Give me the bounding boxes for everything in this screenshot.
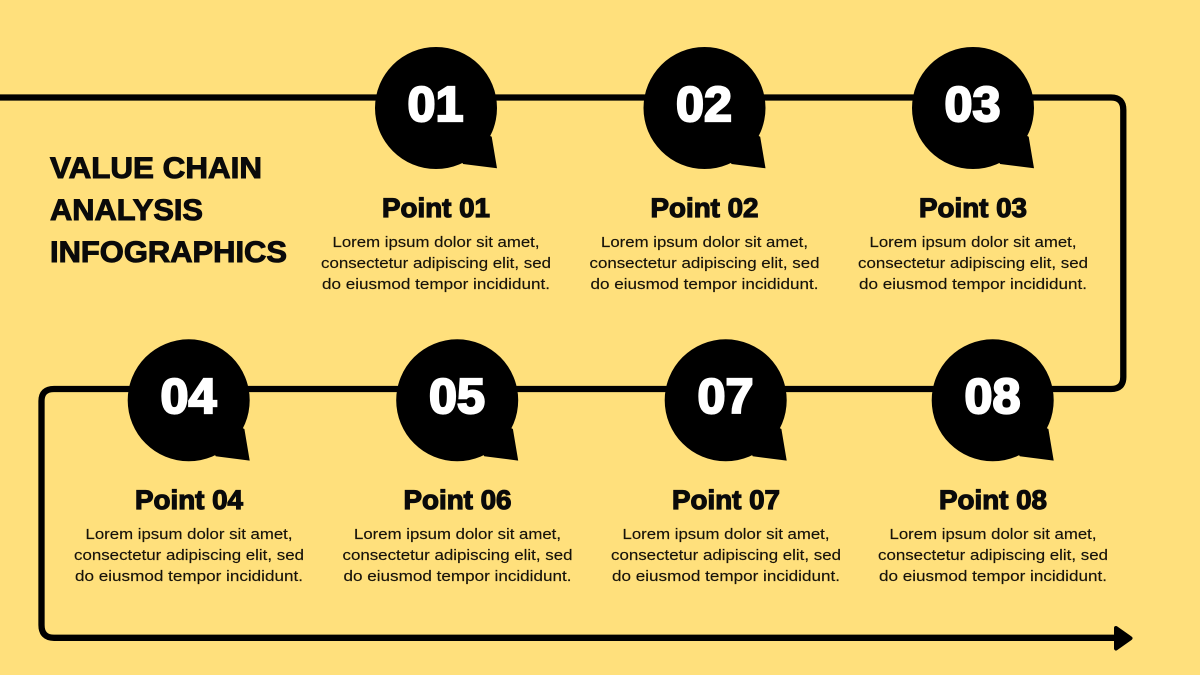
description 07: do eiusmod tempor incididunt. [612, 569, 840, 585]
heading: Point 03: Point 03 [919, 193, 1027, 223]
heading: Point 07: Point 07 [672, 485, 780, 515]
description 01: do eiusmod tempor incididunt. [322, 277, 550, 293]
description 03 [858, 235, 1088, 293]
number 08: 08 [964, 370, 1020, 424]
title [50, 152, 287, 269]
number 04: 04 [160, 370, 216, 424]
description 04 [74, 527, 304, 585]
description 04: do eiusmod tempor incididunt. [75, 569, 303, 585]
step 01 [321, 47, 551, 293]
description 03: Lorem ipsum dolor sit amet, [870, 235, 1076, 251]
number 03: 03 [944, 78, 1000, 132]
description 05: do eiusmod tempor incididunt. [344, 569, 572, 585]
icon: speech bubble 02 [644, 47, 766, 169]
title: VALUE CHAIN [50, 152, 262, 185]
heading: Point 06: Point 06 [404, 485, 512, 515]
step 02 [590, 47, 820, 293]
description 02 [590, 235, 820, 293]
description 08: do eiusmod tempor incididunt. [879, 569, 1107, 585]
number 05: 05 [429, 370, 485, 424]
description 04: Lorem ipsum dolor sit amet, [86, 527, 292, 543]
step 04 [74, 339, 304, 585]
description 02: consectetur adipiscing elit, sed [590, 256, 820, 272]
step 07 [611, 339, 841, 585]
description 05: Lorem ipsum dolor sit amet, [354, 527, 561, 543]
description 05 [342, 527, 572, 585]
step 05 [342, 339, 572, 585]
description 02: Lorem ipsum dolor sit amet, [601, 235, 808, 251]
description 01 [321, 235, 551, 293]
heading: Point 01: Point 01 [382, 193, 490, 223]
title: ANALYSIS [50, 194, 203, 227]
description 08 [878, 527, 1108, 585]
heading: Point 08: Point 08 [939, 485, 1047, 515]
description 05: consectetur adipiscing elit, sed [342, 548, 572, 564]
heading: Point 04: Point 04 [135, 485, 243, 515]
connector arrow path [0, 98, 1130, 648]
description 01: Lorem ipsum dolor sit amet, [332, 235, 540, 251]
description 07: consectetur adipiscing elit, sed [611, 548, 841, 564]
icon: speech bubble 07 [665, 339, 787, 461]
icon: speech bubble 01 [375, 47, 497, 169]
number 07: 07 [698, 370, 754, 424]
description 01: consectetur adipiscing elit, sed [321, 256, 551, 272]
icon: speech bubble 05 [396, 339, 518, 461]
description 04: consectetur adipiscing elit, sed [74, 548, 304, 564]
title: INFOGRAPHICS [50, 236, 287, 269]
heading: Point 02: Point 02 [650, 193, 758, 223]
icon: speech bubble 08 [932, 339, 1054, 461]
description 07 [611, 527, 841, 585]
description 03: do eiusmod tempor incididunt. [859, 277, 1087, 293]
step 08 [878, 339, 1108, 585]
description 08: consectetur adipiscing elit, sed [878, 548, 1108, 564]
number 02: 02 [676, 78, 732, 132]
description 02: do eiusmod tempor incididunt. [590, 277, 818, 293]
number 01: 01 [408, 78, 464, 132]
icon: speech bubble 04 [128, 339, 250, 461]
description 08: Lorem ipsum dolor sit amet, [890, 527, 1096, 543]
step 03 [858, 47, 1088, 293]
description 07: Lorem ipsum dolor sit amet, [622, 527, 830, 543]
icon: speech bubble 03 [912, 47, 1034, 169]
description 03: consectetur adipiscing elit, sed [858, 256, 1088, 272]
